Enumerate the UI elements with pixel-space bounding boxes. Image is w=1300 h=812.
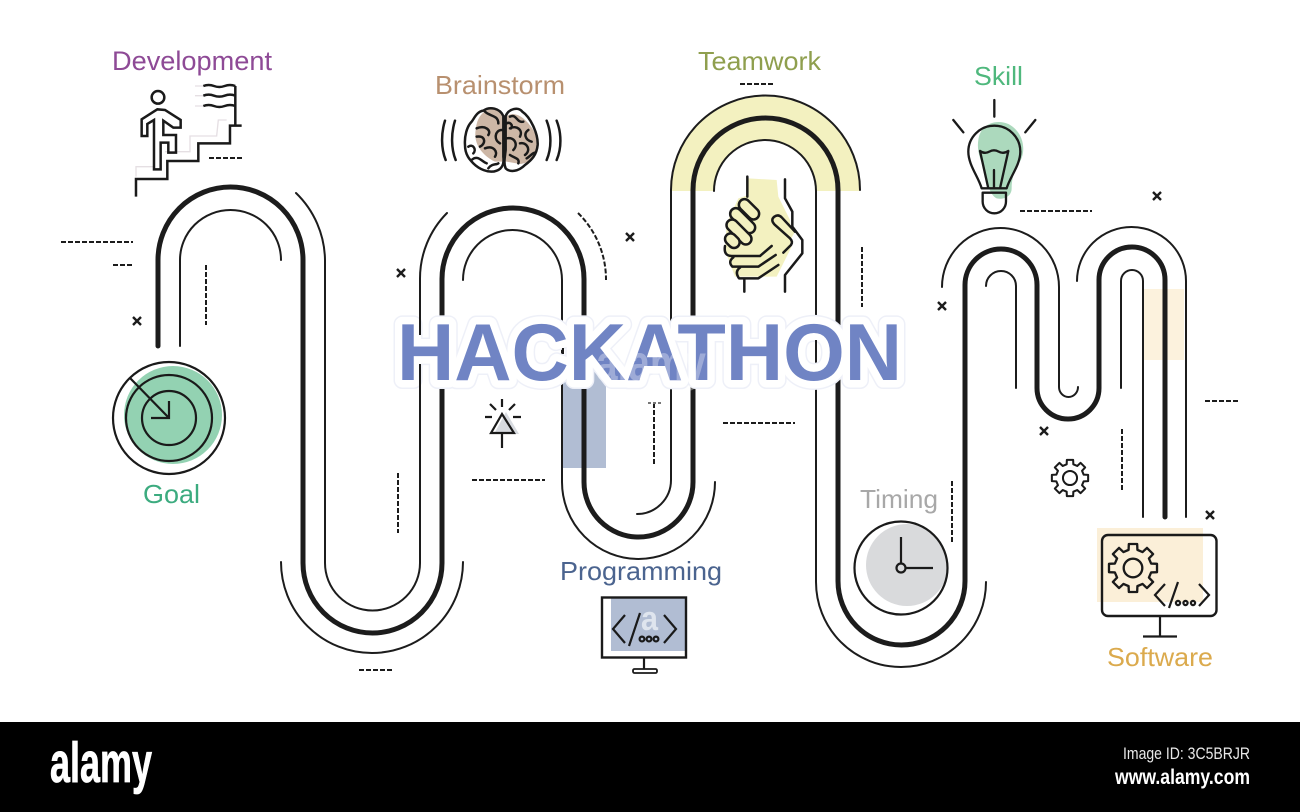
stairs [136,126,242,197]
footer website: www.alamy.com [1114,766,1250,789]
icon: person climbing stairs to flag [136,85,242,197]
monitor stand [643,657,645,669]
code symbol [613,613,676,646]
highlight: teamwork arch fill [671,96,860,191]
thumb [772,215,795,253]
label: Teamwork: Teamwork [698,46,822,76]
monitor base [633,669,657,673]
brain waves left [442,121,456,160]
clock pivot [896,564,906,572]
goal green fill [124,366,222,464]
monitor blue fill [611,597,686,651]
clock grey fill [866,524,948,606]
heading letters: HACKATHON [397,308,902,398]
icon: idea arrow triangle [485,399,521,448]
bulb glass [968,126,1020,188]
dashed accent lines [61,84,1238,670]
bulb base [983,193,1006,213]
heading halo outer: HACKATHON [397,308,902,398]
highlight: programming road block [562,360,606,468]
winding road [158,96,1186,667]
brain waves right [547,121,560,160]
monitor frame [602,598,686,658]
label: Timing: Timing [860,484,938,514]
fingers [723,197,761,250]
footer logo: alamy [50,731,152,795]
label: Development: Development [112,46,272,76]
software monitor stand [1143,616,1177,636]
road: thin edge lines [180,96,1186,667]
brain colour fill [475,109,537,164]
palm lines [725,246,778,278]
flag [203,85,235,126]
monitor watermark letter: a [641,600,659,638]
software cream fill [1097,528,1203,602]
clock face [854,522,948,614]
goal arrow [130,378,169,418]
idea triangle and stem [491,414,514,448]
icon: clock [854,522,948,614]
footer image id: Image ID: 3C5BRJR [1123,744,1250,763]
person [142,91,181,169]
icon: programming monitor [602,597,686,673]
icon: handshake [723,177,802,292]
icon: software monitor [1097,528,1216,636]
icon: brain [442,108,560,172]
clock hands [901,537,933,568]
label: Brainstorm: Brainstorm [435,70,565,100]
road: thick centre line [158,118,1165,645]
decorative crosses [133,192,1214,519]
stair shadow [136,86,227,177]
icon: goal target [113,362,225,474]
label: Skill: Skill [974,61,1023,91]
software monitor frame [1102,535,1216,616]
highlight: software road block [1143,289,1184,360]
wrist lines [744,177,802,292]
heading halo inner: HACKATHON [397,308,902,398]
brain folds [468,112,535,168]
software code symbol [1155,582,1209,608]
bulb green fill [978,122,1023,199]
goal rings [113,362,225,474]
road fragments visible through letter counters [420,300,816,392]
bulb filament [980,150,1008,188]
stock watermark over heading: alamy [596,335,706,391]
label: Goal: Goal [143,479,200,509]
icon: light bulb [953,100,1035,213]
icon: small gear [1052,460,1088,496]
brain hemispheres [465,108,504,172]
label: Programming: Programming [560,556,722,586]
footer bar [0,722,1300,812]
idea triangle shadow [494,412,519,434]
software gear [1109,544,1157,592]
idea rays [485,399,521,417]
label: Software: Software [1107,642,1213,672]
heading: HACKATHON [397,300,902,398]
bulb rays [953,100,1035,132]
handshake yellow fill [725,178,792,277]
footer background [0,722,1300,812]
